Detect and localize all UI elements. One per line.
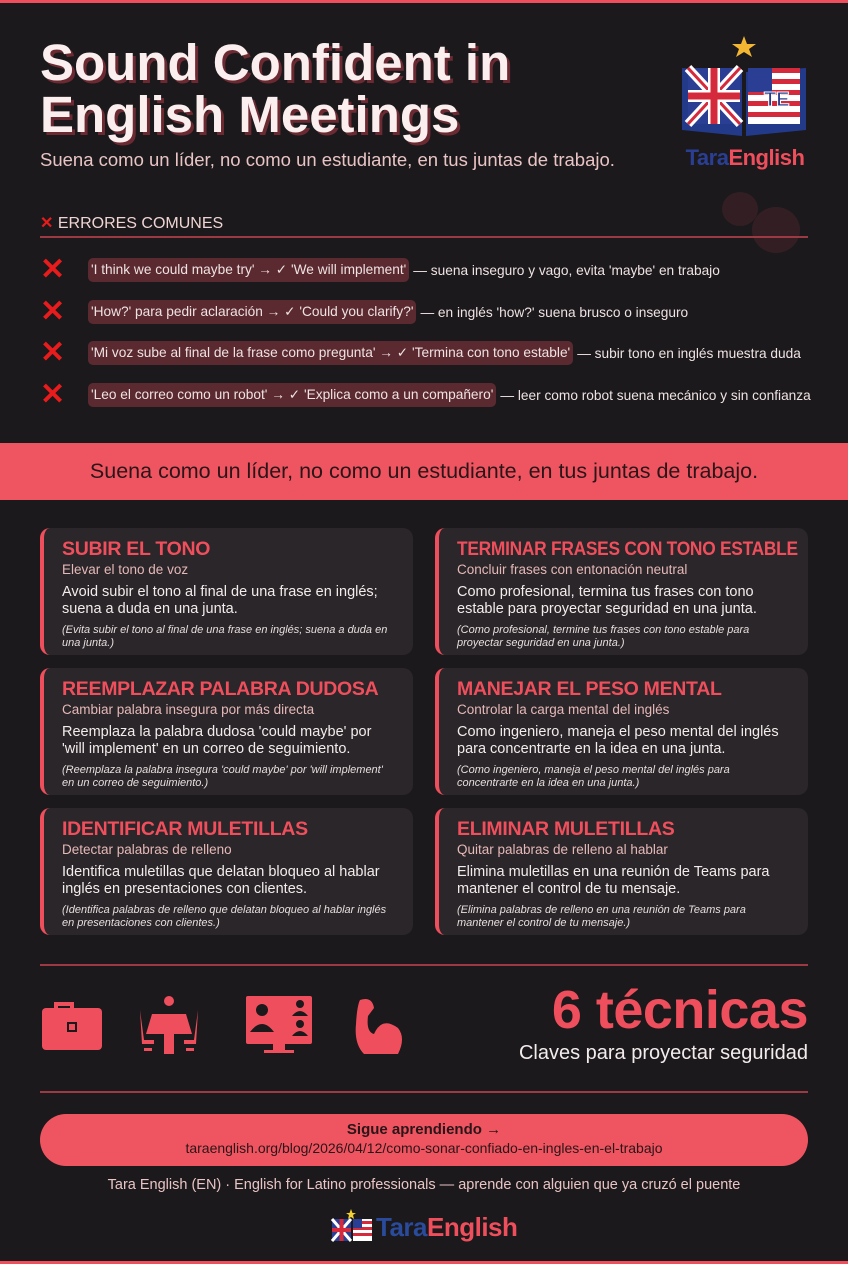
error list bbox=[40, 253, 811, 411]
icon: briefcase bbox=[42, 1002, 102, 1050]
subtitle: Suena como un líder, no como un estudiante, en tus juntas de trabajo. bbox=[40, 149, 615, 170]
footer logo bbox=[330, 1209, 517, 1242]
card 5: IDENTIFICAR MULETILLAS bbox=[62, 818, 308, 840]
error row 1 bbox=[40, 253, 720, 286]
card 5: Detectar palabras de relleno bbox=[62, 842, 232, 857]
CTA button bbox=[40, 1114, 808, 1166]
card 1 bbox=[40, 528, 413, 655]
icon: meeting bbox=[140, 996, 198, 1054]
card 4: MANEJAR EL PESO MENTAL bbox=[457, 678, 722, 700]
card 3: (Reemplaza la palabra insegura 'could maybe' por 'will implement' en un correo de seguimiento.) bbox=[62, 764, 383, 789]
icons row bbox=[42, 996, 402, 1054]
error row 4: — leer como robot suena mecánico y sin confianza bbox=[500, 388, 811, 402]
card 2: Como profesional, termina tus frases con tono estable para proyectar seguridad en una junta. bbox=[457, 584, 757, 617]
title bbox=[40, 34, 510, 146]
card 2: (Como profesional, termine tus frases con tono estable para proyectar seguridad en una junta.) bbox=[457, 624, 749, 649]
error row 1: 'I think we could maybe try' → ✓ 'We will implement' bbox=[91, 262, 406, 277]
card 6: (Elimina palabras de relleno en una reunión de Teams para mantener el control de tu mensaje.) bbox=[457, 904, 746, 929]
card 1: (Evita subir el tono al final de una frase en inglés; suena a duda en una junta.) bbox=[62, 624, 387, 649]
card 4: Como ingeniero, maneja el peso mental del inglés para concentrarte en la idea en una junta. bbox=[457, 724, 779, 757]
card 3: Reemplaza la palabra dudosa 'could maybe' por 'will implement' en un correo de seguimiento. bbox=[62, 724, 371, 757]
card 2: Concluir frases con entonación neutral bbox=[457, 562, 687, 577]
card 1: Elevar el tono de voz bbox=[62, 562, 188, 577]
card 5: Identifica muletillas que delatan bloqueo al hablar inglés en presentaciones con clientes. bbox=[62, 864, 380, 897]
error row 3: 'Mi voz sube al final de la frase como pregunta' → ✓ 'Termina con tono estable' bbox=[91, 345, 570, 360]
card 6: Elimina muletillas en una reunión de Teams para mantener el control de tu mensaje. bbox=[457, 864, 769, 897]
error row 2 bbox=[40, 295, 688, 328]
card 3 bbox=[40, 668, 413, 795]
error row 2: 'How?' para pedir aclaración → ✓ 'Could you clarify?' bbox=[91, 304, 413, 319]
error row 2: ✕ bbox=[40, 295, 65, 328]
error row 4 bbox=[40, 378, 811, 411]
card 6: ELIMINAR MULETILLAS bbox=[457, 818, 674, 840]
stat: 6 tecnicas: Claves para proyectar seguridad bbox=[519, 1042, 808, 1064]
card 2 bbox=[435, 528, 808, 655]
banner: Suena como un líder, no como un estudiante, en tus juntas de trabajo. bbox=[90, 459, 758, 483]
card 3: REEMPLAZAR PALABRA DUDOSA bbox=[62, 678, 378, 700]
icon: video call bbox=[246, 996, 312, 1053]
error row 1: ✕ bbox=[40, 253, 65, 286]
card 5 bbox=[40, 808, 413, 935]
errores heading: ✕ ERRORES COMUNES bbox=[40, 215, 223, 232]
card 1: Avoid subir el tono al final de una frase en inglés; suena a duda en una junta. bbox=[62, 584, 378, 617]
footer logo: TaraEnglish bbox=[376, 1212, 517, 1242]
card 4: Controlar la carga mental del inglés bbox=[457, 702, 669, 717]
logo: TaraEnglish bbox=[686, 145, 804, 170]
card 1: SUBIR EL TONO bbox=[62, 538, 210, 560]
logo bbox=[682, 36, 806, 170]
logo: TE bbox=[764, 89, 790, 111]
CTA button: taraenglish.org/blog/2026/04/12/como-sonar-confiado-en-ingles-en-el-trabajo bbox=[185, 1140, 663, 1156]
banner bbox=[0, 443, 848, 500]
card 2: TERMINAR FRASES CON TONO ESTABLE bbox=[457, 538, 798, 560]
error row 2: — en inglés 'how?' suena brusco o inseguro bbox=[420, 304, 688, 320]
stat: 6 tecnicas bbox=[519, 980, 808, 1064]
error row 1: — suena inseguro y vago, evita 'maybe' en trabajo bbox=[413, 262, 720, 278]
decor: chat bubbles bbox=[722, 192, 758, 226]
card 6 bbox=[435, 808, 808, 935]
card 6: Quitar palabras de relleno al hablar bbox=[457, 842, 668, 857]
error row 4: ✕ bbox=[40, 378, 65, 411]
title: English Meetings bbox=[40, 86, 459, 143]
error row 3 bbox=[40, 336, 801, 369]
error row 4: 'Leo el correo como un robot' → ✓ 'Explica como a un compañero' bbox=[91, 387, 493, 402]
stat: 6 tecnicas: 6 técnicas bbox=[552, 980, 808, 1040]
footer text: Tara English (EN) · English for Latino professionals — aprende con alguien que ya cruzó el puente bbox=[108, 1177, 740, 1193]
card 4: (Como ingeniero, maneja el peso mental del inglés para concentrarte en la idea en una junta.) bbox=[457, 764, 730, 789]
title: Sound Confident in bbox=[40, 34, 510, 91]
top border bbox=[0, 0, 848, 3]
CTA button: Sigue aprendiendo → bbox=[347, 1121, 501, 1138]
error row 3: — subir tono en inglés muestra duda bbox=[577, 346, 801, 360]
card 3: Cambiar palabra insegura por más directa bbox=[62, 702, 314, 717]
card 4 bbox=[435, 668, 808, 795]
error row 3: ✕ bbox=[40, 336, 65, 369]
icon: arm bbox=[356, 999, 402, 1054]
card 5: (Identifica palabras de relleno que delatan bloqueo al hablar inglés en presentaciones con clientes.) bbox=[62, 904, 386, 929]
bottom border bbox=[0, 1261, 848, 1264]
